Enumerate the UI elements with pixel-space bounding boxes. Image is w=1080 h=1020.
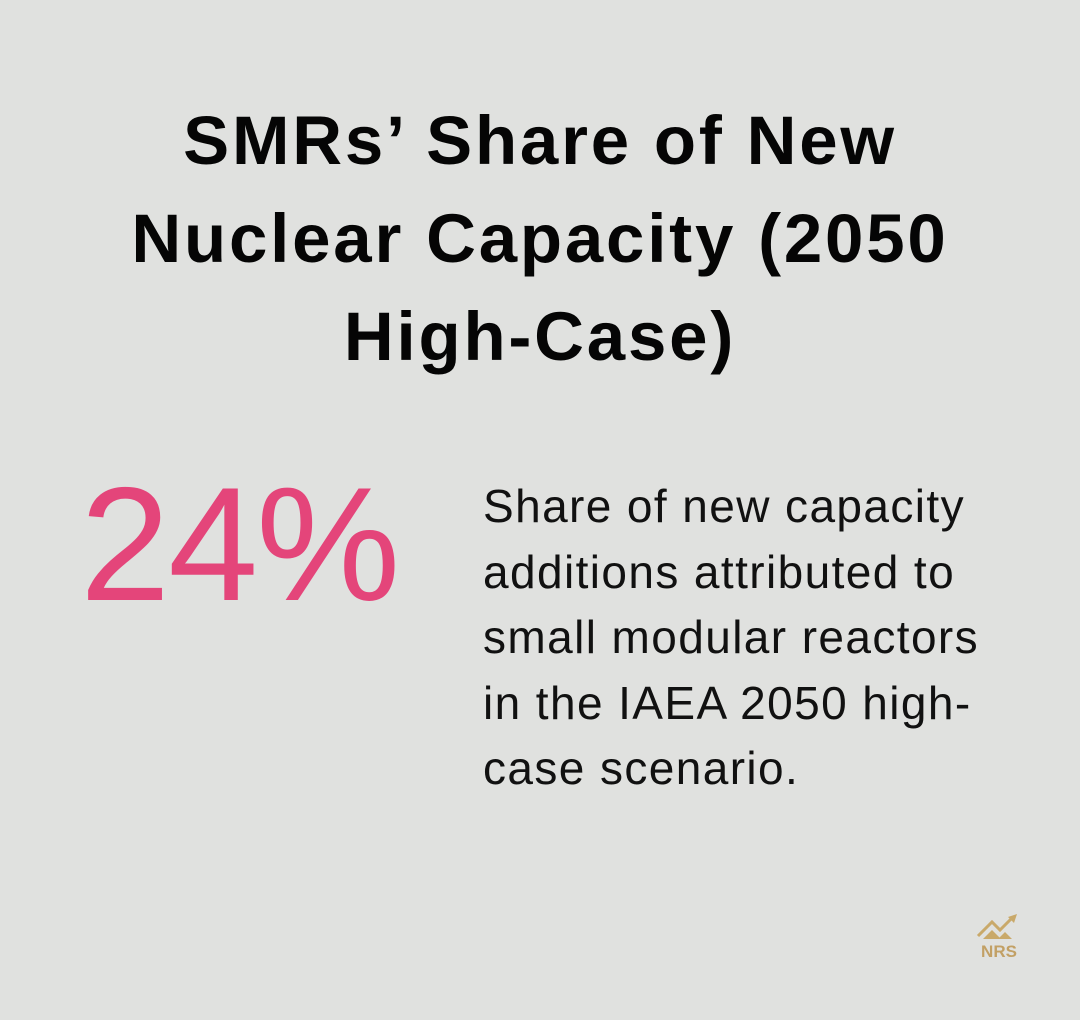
title: Nuclear Capacity (2050 — [131, 200, 949, 277]
title — [131, 102, 949, 375]
title: High-Case) — [344, 298, 736, 375]
description text: in the IAEA 2050 high- — [483, 676, 972, 728]
description text: case scenario. — [483, 742, 799, 794]
description text: additions attributed to — [483, 546, 955, 598]
description text — [483, 480, 979, 794]
icon: NRS logo: NRS — [981, 942, 1017, 961]
description text: Share of new capacity — [483, 480, 965, 532]
icon: NRS logo — [977, 914, 1017, 961]
description text: small modular reactors — [483, 611, 979, 663]
big stat: 24% — [80, 454, 398, 635]
title: SMRs’ Share of New — [183, 102, 897, 179]
